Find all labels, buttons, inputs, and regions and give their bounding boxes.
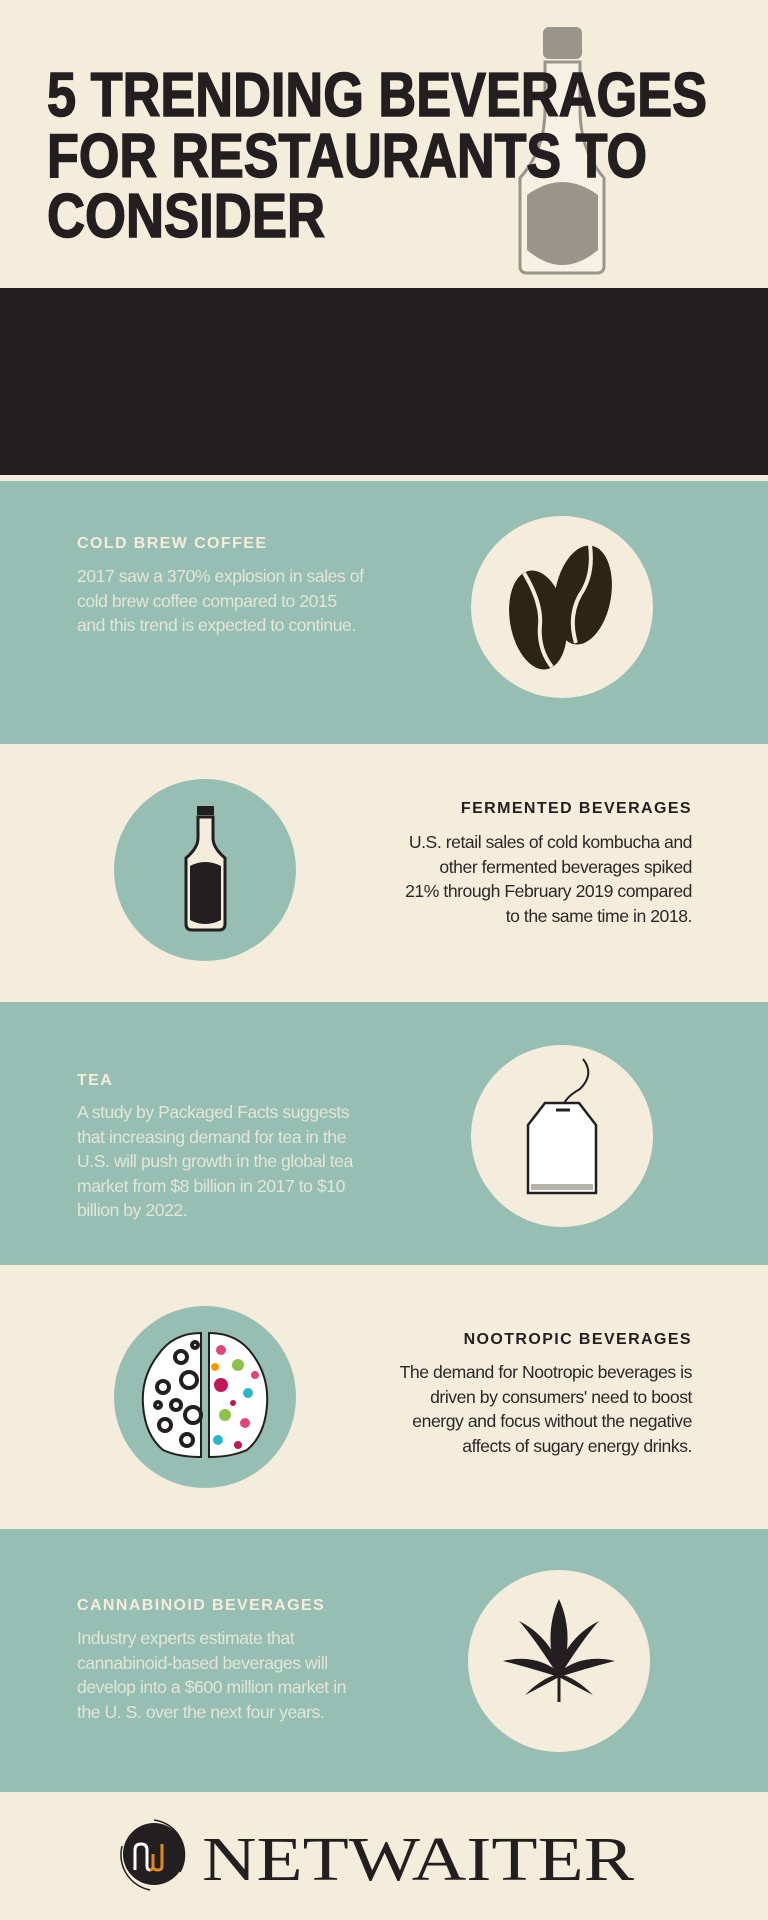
icon: netwaiter logo mark [120, 1819, 186, 1891]
panel: tea [0, 1002, 768, 1265]
dark band [0, 288, 768, 475]
text: nootropic [400, 1362, 692, 1456]
text: tea [77, 1102, 354, 1220]
heading: tea: TEA [77, 1072, 113, 1089]
text: nootropic: affects of sugary energy drinks. [462, 1436, 692, 1456]
icon: tea bag [471, 1045, 653, 1227]
icon: brain [114, 1306, 296, 1488]
footer logo [120, 1819, 635, 1894]
icon: bottle [114, 779, 296, 961]
panel: cold brew coffee [0, 481, 768, 744]
text: tea: A study by Packaged Facts suggests [77, 1102, 349, 1122]
text: cannabinoid: Industry experts estimate that [77, 1628, 294, 1648]
text: nootropic: The demand for Nootropic beverages is [400, 1362, 692, 1382]
text: cannabinoid: develop into a $600 million market in [77, 1677, 346, 1697]
text: cannabinoid: the U. S. over the next four years. [77, 1702, 324, 1722]
text: tea: market from $8 billion in 2017 to $10 [77, 1176, 345, 1196]
text: tea: U.S. will push growth in the global tea [77, 1151, 353, 1171]
text: cold brew [77, 566, 364, 635]
text: tea: billion by 2022. [77, 1200, 187, 1220]
text: nootropic: driven by consumers' need to boost [430, 1386, 692, 1406]
text: nootropic: energy and focus without the negative [412, 1411, 692, 1431]
text: cannabinoid [77, 1628, 346, 1722]
text: fermented: U.S. retail sales of cold kombucha and [409, 832, 692, 852]
text: tea: that increasing demand for tea in the [77, 1126, 346, 1146]
wordmark: NETWAITER: NETWAITER [202, 1826, 635, 1894]
text: fermented: other fermented beverages spiked [439, 856, 692, 876]
title: CONSIDER [47, 182, 325, 250]
text: cold brew: 2017 saw a 370% explosion in sales of [77, 566, 364, 586]
text: fermented [405, 832, 692, 926]
text: cold brew: cold brew coffee compared to 2015 [77, 590, 337, 610]
text: cold brew: and this trend is expected to continue. [77, 615, 356, 635]
icon: coffee beans [471, 516, 653, 698]
header bottle illustration [518, 27, 606, 274]
heading: nootropic: NOOTROPIC BEVERAGES [464, 1331, 692, 1348]
title: FOR RESTAURANTS TO [47, 122, 647, 191]
heading: cannabinoid: CANNABINOID BEVERAGES [77, 1597, 325, 1614]
heading: fermented: FERMENTED BEVERAGES [461, 800, 692, 817]
heading: cold brew coffee: COLD BREW COFFEE [77, 535, 267, 552]
panel: fermented beverages [114, 779, 692, 961]
title [47, 61, 707, 250]
text: cannabinoid: cannabinoid-based beverages will [77, 1652, 328, 1672]
panel: cannabinoid beverages [0, 1529, 768, 1792]
icon: cannabis leaf [468, 1570, 650, 1752]
text: fermented: to the same time in 2018. [506, 906, 692, 926]
panel: nootropic beverages [114, 1306, 692, 1488]
text: fermented: 21% through February 2019 compared [405, 881, 692, 901]
